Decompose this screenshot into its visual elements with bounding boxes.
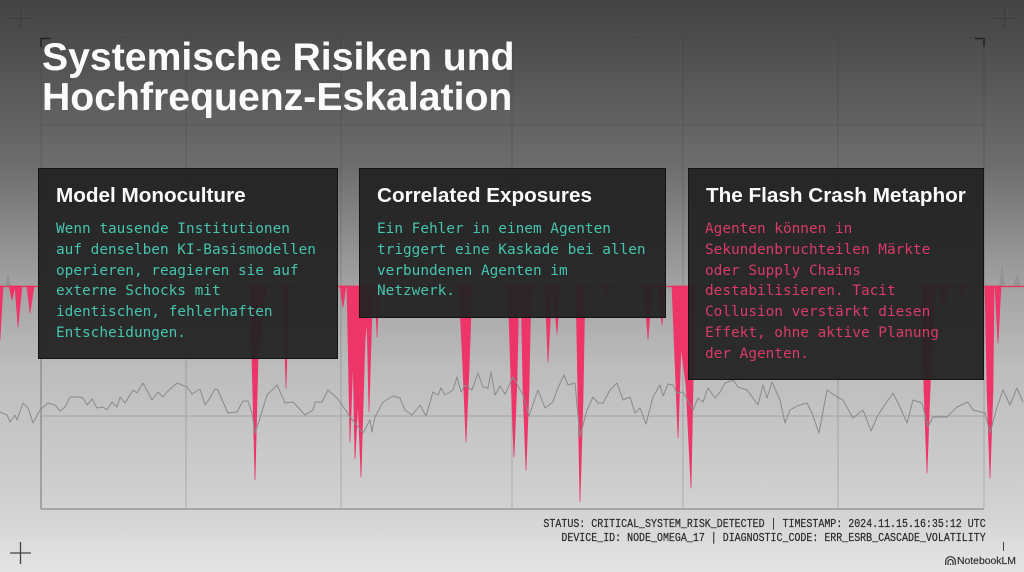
panel body text: Wenn tausende Institutionen auf denselben KI-Basismodellen operieren, reagieren sie auf externe Schocks mit identischen, fehlerhaften Entscheidungen. <box>56 221 316 341</box>
red baseline <box>0 286 1024 288</box>
panel heading: The Flash Crash Metaphor <box>706 184 966 207</box>
icon: NotebookLM logo <box>945 556 956 565</box>
faint grey upward ticks <box>5 264 1021 286</box>
panel: Correlated Exposures <box>359 168 666 318</box>
title: Systemische Risiken und Hochfrequenz-Eskalation <box>42 36 515 119</box>
chart grid <box>41 38 984 509</box>
panel: Model Monoculture <box>38 168 338 359</box>
status footer: STATUS: CRITICAL_SYSTEM_RISK_DETECTED | TIMESTAMP: 2024.11.15.16:35:12 UTC DEVICE_ID: NODE_OMEGA_17 | DIAGNOSTIC_CODE: ERR_ESRB_CASCADE_VOLATILITY <box>544 518 986 545</box>
NotebookLM brand mark: NotebookLM <box>957 556 1016 567</box>
corner bracket marks <box>41 38 984 47</box>
panel body text: Ein Fehler in einem Agenten triggert eine Kaskade bei allen verbundenen Agenten im Netzwerk. <box>377 221 646 299</box>
grey signal line <box>0 372 1023 437</box>
red crash spikes <box>0 286 1001 502</box>
panel heading: Correlated Exposures <box>377 184 592 207</box>
panel body text: Agenten können in Sekundenbruchteilen Märkte oder Supply Chains destabilisieren. Tacit Collusion verstärkt diesen Effekt, ohne aktive Planung der Agenten. <box>705 221 939 362</box>
panel heading: Model Monoculture <box>56 184 246 207</box>
panel: The Flash Crash Metaphor <box>688 168 984 380</box>
